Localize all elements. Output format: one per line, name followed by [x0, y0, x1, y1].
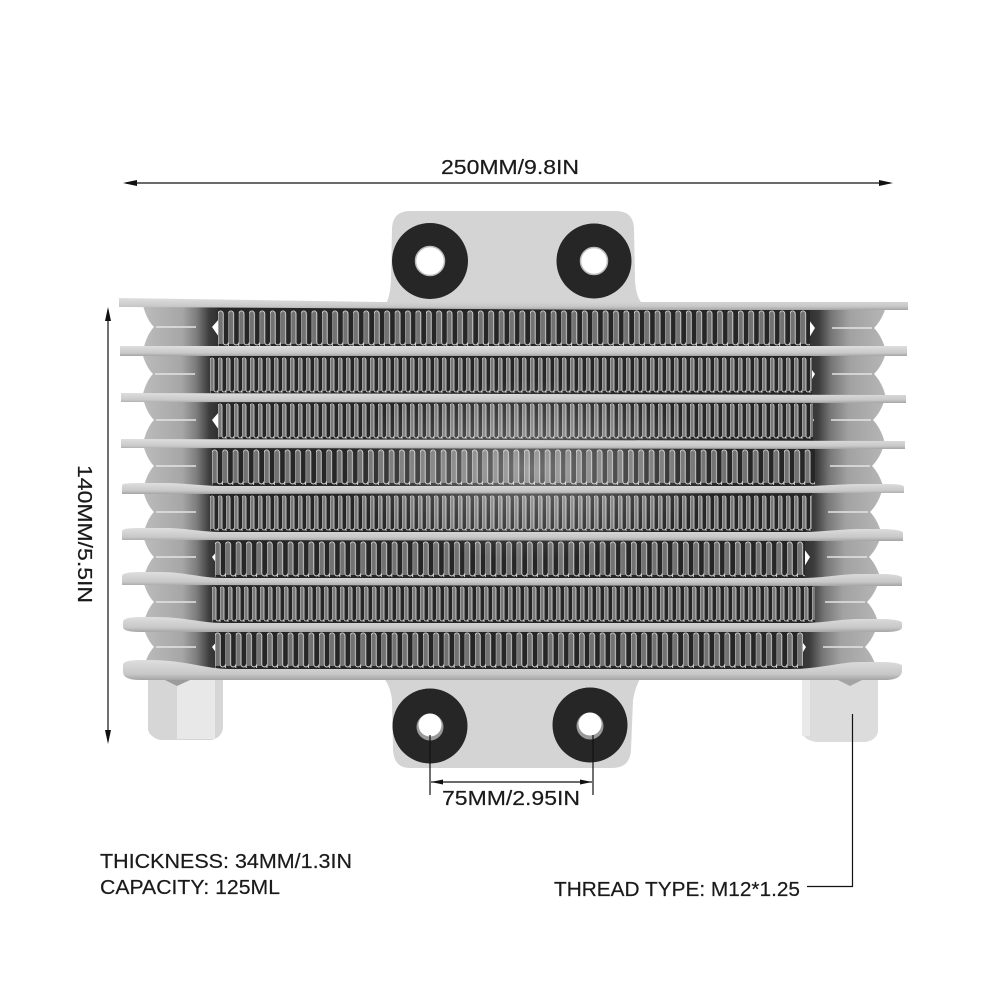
- height dimension arrow: [105, 307, 111, 744]
- grommet: bottom right: [552, 688, 628, 762]
- specs text: [100, 851, 352, 899]
- height label: 140MM/5.5IN: [73, 465, 95, 603]
- top mounting tab: [384, 211, 645, 306]
- right tank stack: [797, 306, 886, 671]
- width dimension arrow: [123, 180, 893, 186]
- width label: 250MM/9.8IN: [441, 157, 579, 179]
- specs text: THICKNESS: 34MM/1.3IN: [100, 851, 352, 873]
- grommet: top right: [556, 224, 632, 298]
- fin highlight: [340, 380, 720, 560]
- cooling fins: [210, 306, 815, 672]
- left tank stack: [142, 305, 222, 671]
- hex bolt: right: [802, 678, 878, 742]
- thread type label: THREAD TYPE: M12*1.25: [554, 879, 800, 901]
- mounting spacing label: 75MM/2.95IN: [442, 788, 580, 810]
- grommet: bottom left: [392, 688, 468, 764]
- mounting spacing dimension: [430, 735, 593, 795]
- grommet: top left: [392, 223, 468, 299]
- plates: [119, 298, 908, 680]
- hex bolt: left: [148, 678, 223, 740]
- thread type leader line: [807, 714, 852, 886]
- specs text: CAPACITY: 125ML: [100, 877, 280, 899]
- bottom mounting tab: [378, 672, 645, 768]
